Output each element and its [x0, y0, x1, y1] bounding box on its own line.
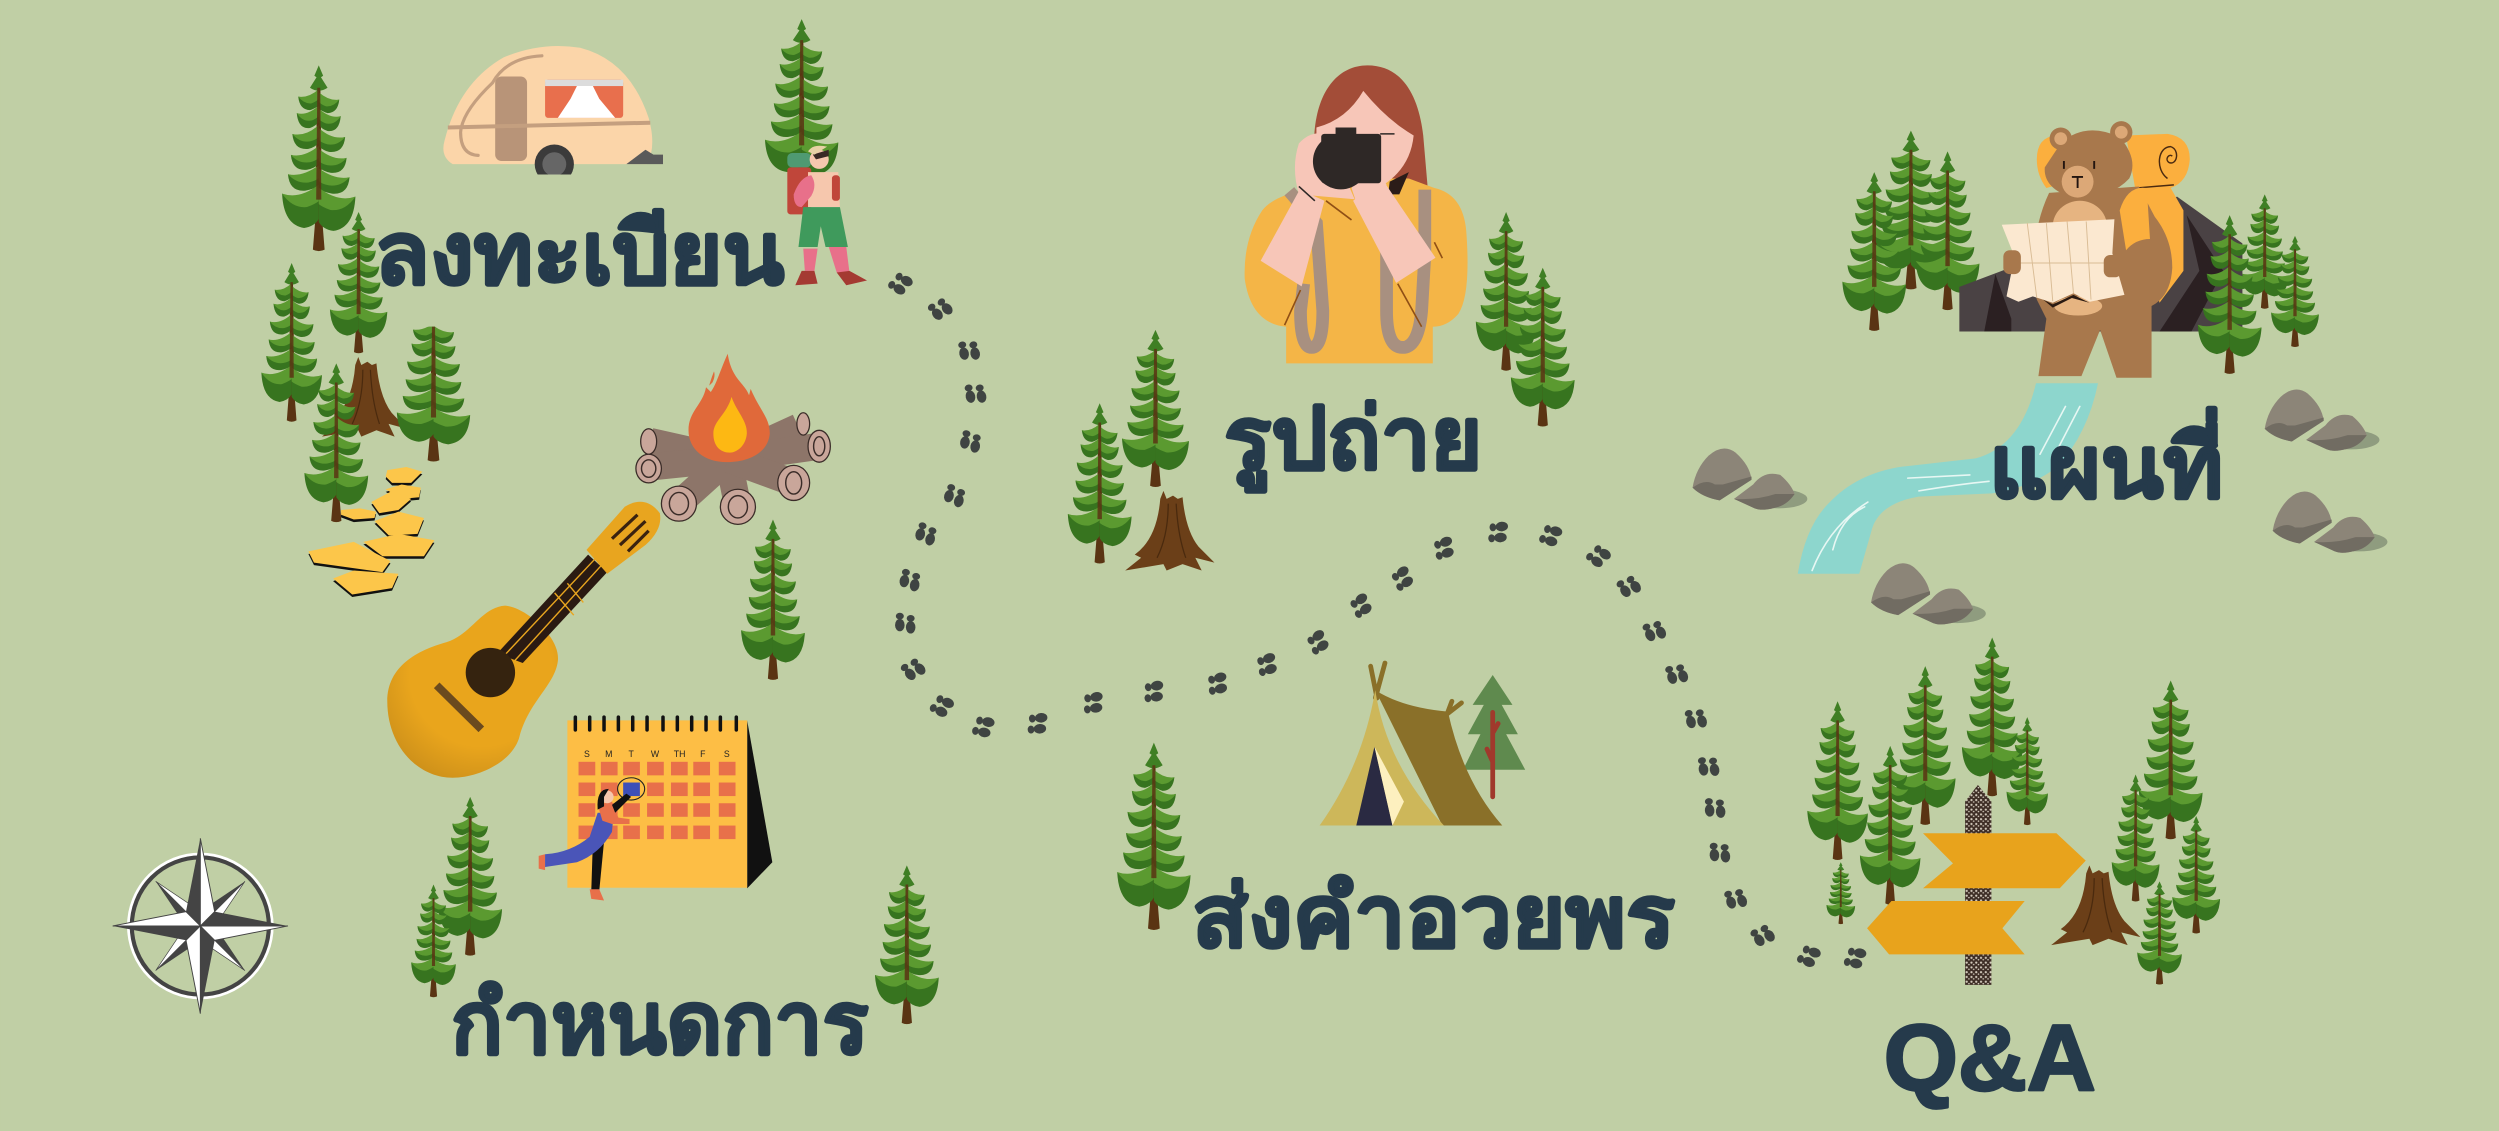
footprint trail [886, 270, 1867, 970]
pine tree [2137, 881, 2182, 985]
pine tree [304, 363, 368, 522]
weekday labels: T [628, 749, 634, 759]
tree stump [322, 357, 407, 437]
icon: tent with small tree [1320, 663, 1525, 826]
icon: stepping stones [308, 467, 434, 597]
pine tree [2112, 775, 2160, 902]
calendar rings [575, 717, 736, 730]
pine tree [282, 65, 355, 251]
pine tree [2172, 816, 2220, 933]
icon: mountain [1959, 197, 2242, 331]
icon: hiker [787, 146, 867, 285]
right arrow sign [1923, 833, 2086, 888]
weekday labels: TH [674, 749, 685, 759]
icon: calendar [567, 717, 772, 888]
pine tree [2198, 215, 2262, 374]
pine tree [2007, 717, 2048, 825]
pine tree [1842, 172, 1906, 331]
icon: bear with map [2002, 121, 2190, 378]
weekday labels: M [605, 749, 612, 759]
pine tree [1962, 637, 2022, 796]
label: map: แผนที่ [1989, 406, 2223, 516]
pine tree [2139, 681, 2203, 839]
tree stump [2051, 865, 2140, 945]
pine tree [1117, 743, 1191, 930]
pine tree [330, 212, 387, 353]
label: register: ลงทะเบียน [375, 207, 784, 303]
icon: guitar [387, 502, 660, 778]
pine tree [1476, 212, 1536, 371]
weekday labels [584, 749, 730, 759]
pine tree [438, 797, 502, 956]
pine tree [1511, 268, 1575, 426]
pine tree [741, 520, 805, 680]
icon: campfire [636, 354, 830, 524]
icon: photographer [1245, 65, 1468, 363]
pine tree [261, 263, 322, 422]
icon: caravan [443, 46, 663, 184]
weekday labels: W [651, 749, 660, 759]
weekday labels: S [724, 749, 730, 759]
left arrow sign [1867, 901, 2025, 954]
icon: compass rose [113, 838, 288, 1014]
pine tree [411, 885, 456, 997]
cut-top pine tree [396, 326, 470, 462]
weekday labels: S [584, 749, 590, 759]
pine tree [1860, 746, 1920, 905]
label: send wishes: ส่งคำอวยพร [1192, 870, 1675, 966]
label: Q&A: Q&A [1884, 1005, 2096, 1110]
tree stump [1125, 491, 1214, 571]
pine tree [875, 865, 939, 1024]
pine tree [1876, 131, 1946, 289]
day squares [579, 762, 736, 839]
pine tree [2241, 194, 2289, 309]
weekday labels: F [700, 749, 706, 759]
icon: signpost [1867, 785, 2086, 985]
label: schedule: กำหนดการ [451, 976, 869, 1072]
label: photo: รูปถ่าย [1224, 392, 1482, 493]
pine tree [1916, 151, 1979, 310]
rocks [1871, 563, 1986, 624]
pine tree [1895, 666, 1956, 825]
rocks [2265, 390, 2379, 451]
rocks [1693, 449, 1807, 510]
pine tree [2271, 236, 2319, 347]
pine tree [1068, 403, 1132, 564]
icon: woman marking calendar [539, 789, 631, 900]
pine tree [765, 19, 838, 194]
rocks [2273, 492, 2387, 553]
pine tree [1122, 330, 1189, 487]
pine tree [1826, 862, 1855, 924]
pine tree [1807, 701, 1868, 860]
river [1798, 383, 2098, 574]
